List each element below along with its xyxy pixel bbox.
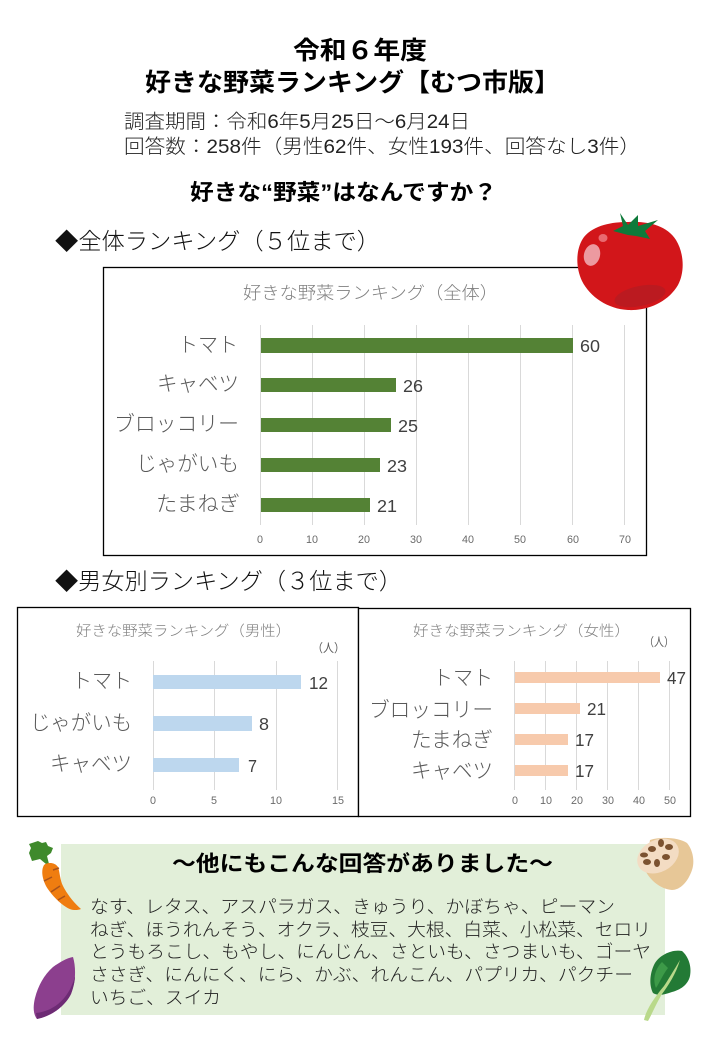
panel: other answers — [61, 844, 665, 1015]
heading: gender ranking: ◆男女別ランキング（３位まで） — [55, 568, 402, 594]
list of other vegetables: ねぎ、ほうれんそう、オクラ、枝豆、大根、白菜、小松菜、セロリ — [90, 920, 651, 940]
icon: carrot — [29, 841, 81, 910]
survey details: 回答数：258件（男性62件、女性193件、回答なし3件） — [124, 136, 640, 158]
axis ticks: overall: 0 — [257, 534, 263, 546]
axis ticks: overall: 50 — [514, 534, 526, 546]
axis ticks: male: 15 — [332, 795, 344, 807]
title: 好きな野菜ランキング【むつ市版】 — [145, 68, 560, 97]
category labels: male: キャベツ — [50, 753, 132, 776]
bars: female — [515, 672, 660, 776]
icon: leafy green — [644, 951, 691, 1021]
category labels: overall: じゃがいも — [136, 453, 239, 476]
value labels: male: 7 — [248, 756, 257, 776]
unit: male: （人） — [312, 641, 345, 655]
list of other vegetables: なす、レタス、アスパラガス、きゅうり、かぼちゃ、ピーマン — [90, 897, 615, 917]
chart title: overall: 好きな野菜ランキング（全体） — [243, 283, 498, 303]
list of other vegetables: ささぎ、にんにく、にら、かぶ、れんこん、パプリカ、パクチー — [90, 965, 633, 985]
value labels: overall: 23 — [387, 456, 407, 476]
panel: overall chart — [104, 268, 646, 556]
axis ticks: male: 5 — [211, 795, 217, 807]
axis ticks: overall: 70 — [619, 534, 631, 546]
title: 令和６年度 — [293, 37, 427, 65]
icon: tomato — [577, 213, 683, 311]
category labels: female: トマト — [433, 667, 493, 690]
category labels: overall — [114, 334, 240, 516]
axis ticks: overall: 60 — [567, 534, 579, 546]
axis ticks: male — [150, 795, 344, 807]
icon: lotus root — [631, 832, 693, 890]
axis ticks: overall: 20 — [358, 534, 370, 546]
axis ticks: overall: 10 — [306, 534, 318, 546]
category labels: overall: ブロッコリー — [114, 413, 239, 436]
value labels: overall: 25 — [398, 416, 418, 436]
panel: male chart — [18, 608, 358, 816]
value labels: male — [248, 673, 328, 776]
category labels: male: トマト — [72, 670, 132, 693]
title — [145, 37, 560, 97]
chart title: male: 好きな野菜ランキング（男性） — [76, 623, 291, 640]
value labels: overall: 21 — [377, 496, 397, 516]
heading: other answers: ～他にもこんな回答がありました～ — [172, 851, 553, 876]
bars: overall — [261, 338, 573, 512]
category labels: female: たまねぎ — [411, 729, 493, 752]
axis ticks: overall — [257, 534, 631, 546]
category labels: female: ブロッコリー — [369, 699, 493, 722]
icon: sweet potato — [34, 957, 75, 1019]
value labels: female: 21 — [587, 699, 606, 719]
category labels: male: じゃがいも — [30, 712, 132, 735]
axis ticks: male: 0 — [150, 795, 156, 807]
panel: female chart — [358, 608, 690, 816]
category labels: overall: トマト — [178, 334, 238, 357]
axis ticks: female: 10 — [540, 795, 552, 807]
list of other vegetables: いちご、スイカ — [90, 988, 221, 1008]
category labels: overall: キャベツ — [157, 373, 239, 396]
value labels: overall: 26 — [403, 376, 423, 396]
axis ticks: overall: 40 — [462, 534, 474, 546]
value labels: male: 12 — [309, 673, 328, 693]
category labels: female: キャベツ — [411, 760, 493, 783]
bars: male — [153, 675, 301, 772]
list of other vegetables: とうもろこし、もやし、にんじん、さといも、さつまいも、ゴーヤ — [90, 942, 651, 962]
value labels: female: 17 — [575, 761, 594, 781]
value labels: female: 17 — [575, 730, 594, 750]
axis ticks: female: 30 — [602, 795, 614, 807]
category labels: female — [369, 667, 493, 783]
category labels: male — [30, 670, 132, 776]
category labels: overall: たまねぎ — [156, 493, 240, 516]
axis ticks: female: 50 — [664, 795, 676, 807]
unit: female: （人） — [644, 635, 674, 649]
list of other vegetables — [90, 897, 651, 1008]
value labels: female: 47 — [667, 668, 686, 688]
survey details — [124, 111, 640, 158]
value labels: overall — [377, 336, 600, 516]
question heading: 好きな“野菜”はなんですか？ — [190, 180, 497, 205]
heading: overall ranking: ◆全体ランキング（５位まで） — [55, 228, 380, 254]
axis ticks: female — [512, 795, 676, 807]
axis ticks: male: 10 — [270, 795, 282, 807]
value labels: male: 8 — [259, 714, 269, 734]
chart title: female: 好きな野菜ランキング（女性） — [413, 623, 630, 640]
axis ticks: overall: 30 — [410, 534, 422, 546]
axis ticks: female: 40 — [633, 795, 645, 807]
axis ticks: female: 0 — [512, 795, 518, 807]
axis ticks: female: 20 — [571, 795, 583, 807]
value labels: female — [575, 668, 686, 781]
survey details: 調査期間：令和6年5月25日～6月24日 — [124, 111, 470, 133]
value labels: overall: 60 — [580, 336, 600, 356]
